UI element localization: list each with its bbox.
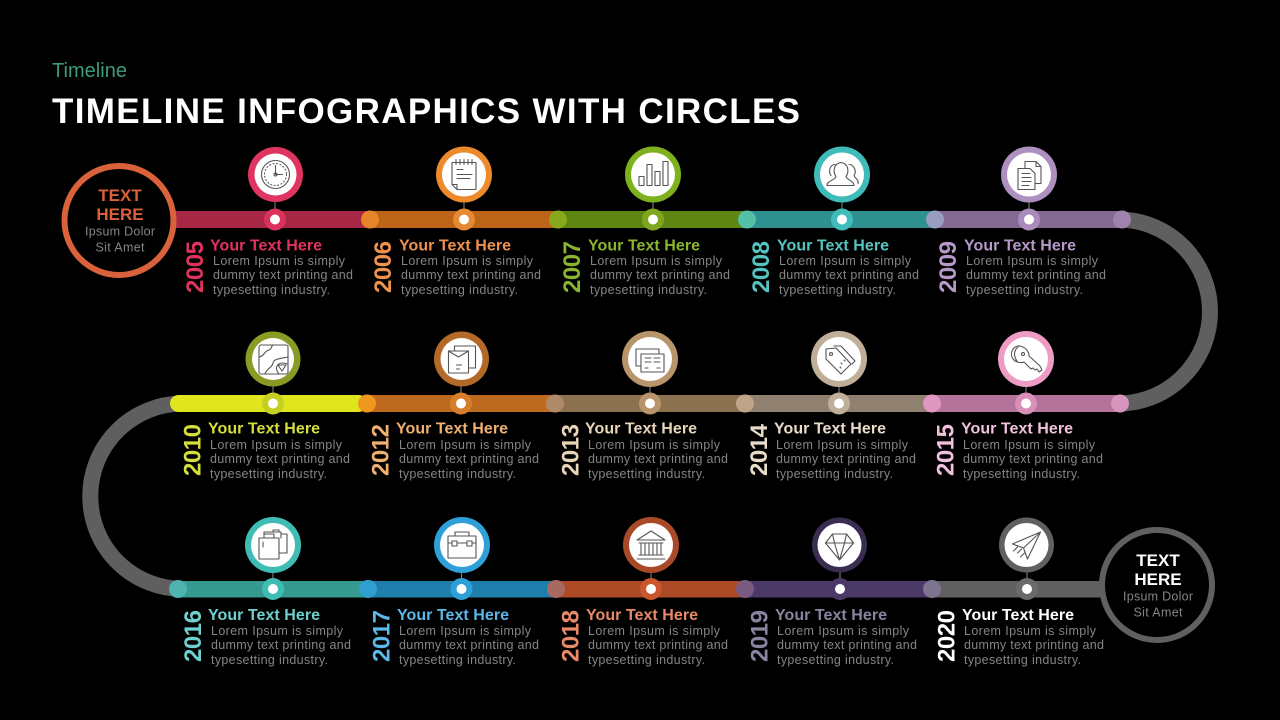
- heading 2009: Your Text Here: [964, 238, 1076, 254]
- milestone 2006: [370, 146, 541, 297]
- icon: clock: [262, 160, 290, 188]
- heading 2012: Your Text Here: [396, 420, 508, 438]
- description 2012: Lorem Ipsum is simply: [399, 438, 532, 452]
- milestone 2015: [932, 331, 1103, 481]
- description 2015: Lorem Ipsum is simply: [963, 438, 1096, 452]
- description 2007: [590, 254, 730, 297]
- icon: cards: [636, 349, 664, 372]
- timeline track: row 2: [170, 394, 1129, 412]
- description 2019: Lorem Ipsum is simply: [777, 624, 910, 638]
- description 2013: dummy text printing and: [588, 452, 728, 466]
- description 2014: Lorem Ipsum is simply: [776, 438, 909, 452]
- description 2018: typesetting industry.: [588, 653, 705, 667]
- year 2007: 2007: [559, 241, 586, 293]
- description 2019: dummy text printing and: [777, 638, 917, 652]
- description 2010: dummy text printing and: [210, 452, 350, 466]
- description 2015: [963, 438, 1103, 481]
- year 2016: 2016: [180, 610, 207, 662]
- milestone 2009: [935, 146, 1106, 297]
- description 2016: [211, 624, 351, 667]
- end circle: [1102, 530, 1212, 640]
- icon: key: [1011, 346, 1042, 372]
- description 2005: [213, 254, 353, 297]
- icon: briefcase: [448, 532, 476, 558]
- milestone 2012: [368, 332, 539, 481]
- milestone 2018: [558, 517, 728, 667]
- milestone 2016: [180, 517, 351, 667]
- year 2010: 2010: [180, 424, 206, 476]
- heading 2010: Your Text Here: [208, 420, 320, 438]
- description 2008: typesetting industry.: [779, 283, 896, 297]
- description 2005: Lorem Ipsum is simply: [213, 254, 346, 268]
- heading 2005: Your Text Here: [210, 238, 322, 254]
- description 2007: dummy text printing and: [590, 268, 730, 282]
- icon: documents: [1018, 162, 1041, 190]
- milestone 2019: [746, 518, 917, 667]
- year 2018: 2018: [558, 610, 584, 662]
- year 2006: 2006: [370, 241, 397, 293]
- description 2007: Lorem Ipsum is simply: [590, 254, 723, 268]
- description 2014: dummy text printing and: [776, 452, 916, 466]
- description 2009: dummy text printing and: [966, 268, 1106, 282]
- description 2006: Lorem Ipsum is simply: [401, 254, 534, 268]
- description 2014: [776, 438, 916, 481]
- description 2016: dummy text printing and: [211, 638, 351, 652]
- end circle: Ipsum Dolor: [1123, 590, 1193, 604]
- eyebrow label: Timeline: [52, 60, 127, 82]
- end circle: TEXT: [1136, 551, 1180, 570]
- milestone 2008: [748, 146, 919, 297]
- icon: people: [827, 162, 858, 186]
- year 2008: 2008: [748, 241, 775, 293]
- description 2020: [964, 624, 1104, 667]
- description 2009: typesetting industry.: [966, 283, 1083, 297]
- icon: luggage: [259, 530, 287, 559]
- description 2013: [588, 438, 728, 481]
- description 2010: Lorem Ipsum is simply: [210, 438, 343, 452]
- year 2013: 2013: [558, 424, 584, 476]
- description 2010: typesetting industry.: [210, 467, 327, 481]
- description 2006: [401, 254, 541, 297]
- milestone 2013: [558, 331, 728, 481]
- description 2016: Lorem Ipsum is simply: [211, 624, 344, 638]
- start circle: Ipsum Dolor: [85, 224, 155, 238]
- milestone 2014: [746, 331, 916, 481]
- description 2019: typesetting industry.: [777, 653, 894, 667]
- icon: bank: [637, 531, 665, 559]
- start circle: Sit Amet: [96, 240, 145, 254]
- heading 2014: Your Text Here: [774, 420, 886, 438]
- year 2009: 2009: [935, 241, 962, 293]
- description 2019: [777, 624, 917, 667]
- milestone 2007: [559, 146, 730, 297]
- description 2012: [399, 438, 539, 481]
- description 2013: Lorem Ipsum is simply: [588, 438, 721, 452]
- heading 2019: Your Text Here: [775, 607, 887, 624]
- description 2017: Lorem Ipsum is simply: [399, 624, 532, 638]
- year 2005: 2005: [182, 241, 209, 293]
- description 2012: dummy text printing and: [399, 452, 539, 466]
- heading 2013: Your Text Here: [585, 420, 697, 438]
- start circle: [64, 166, 174, 275]
- heading 2015: Your Text Here: [961, 420, 1073, 438]
- start circle: HERE: [96, 205, 144, 224]
- end circle: HERE: [1134, 570, 1182, 589]
- description 2013: typesetting industry.: [588, 467, 705, 481]
- icon: map: [259, 345, 288, 374]
- year 2015: 2015: [932, 424, 960, 476]
- description 2008: dummy text printing and: [779, 268, 919, 282]
- description 2016: typesetting industry.: [211, 653, 328, 667]
- year 2012: 2012: [368, 424, 394, 476]
- end circle: Sit Amet: [1134, 606, 1183, 620]
- description 2015: dummy text printing and: [963, 452, 1103, 466]
- year 2017: 2017: [368, 610, 396, 662]
- description 2015: typesetting industry.: [963, 467, 1080, 481]
- curved connector: left: [90, 404, 183, 589]
- description 2010: [210, 438, 350, 481]
- description 2017: [399, 624, 539, 667]
- year 2019: 2019: [746, 610, 774, 662]
- icon: price tags: [826, 346, 855, 374]
- heading 2008: Your Text Here: [777, 238, 889, 254]
- start circle: TEXT: [98, 186, 142, 205]
- timeline track: row 1: [172, 210, 1131, 228]
- milestone 2005: [182, 147, 353, 297]
- year 2014: 2014: [746, 423, 773, 476]
- description 2018: dummy text printing and: [588, 638, 728, 652]
- heading 2016: Your Text Here: [208, 607, 320, 624]
- icon: diamond: [826, 534, 854, 560]
- icon: bar chart: [639, 162, 668, 186]
- heading 2007: Your Text Here: [588, 238, 700, 254]
- milestone 2017: [368, 517, 539, 667]
- description 2014: typesetting industry.: [776, 467, 893, 481]
- description 2006: dummy text printing and: [401, 268, 541, 282]
- description 2017: dummy text printing and: [399, 638, 539, 652]
- description 2009: [966, 254, 1106, 297]
- icon: notepad: [452, 160, 476, 190]
- heading 2018: Your Text Here: [586, 607, 698, 624]
- description 2008: Lorem Ipsum is simply: [779, 254, 912, 268]
- description 2009: Lorem Ipsum is simply: [966, 254, 1099, 268]
- description 2012: typesetting industry.: [399, 467, 516, 481]
- description 2020: typesetting industry.: [964, 653, 1081, 667]
- description 2018: [588, 624, 728, 667]
- description 2005: typesetting industry.: [213, 283, 330, 297]
- year 2020: 2020: [934, 610, 960, 662]
- description 2020: Lorem Ipsum is simply: [964, 624, 1097, 638]
- heading 2020: Your Text Here: [962, 607, 1074, 624]
- description 2017: typesetting industry.: [399, 653, 516, 667]
- milestone 2010: [180, 332, 350, 481]
- icon: paper plane: [1012, 532, 1040, 559]
- timeline track: row 3: [169, 580, 1107, 598]
- description 2008: [779, 254, 919, 297]
- milestone 2020: [934, 518, 1104, 667]
- icon: envelope folder: [448, 346, 476, 373]
- curved connector: right: [1118, 220, 1210, 404]
- description 2006: typesetting industry.: [401, 283, 518, 297]
- heading 2006: Your Text Here: [399, 238, 511, 254]
- description 2005: dummy text printing and: [213, 268, 353, 282]
- heading 2017: Your Text Here: [397, 607, 509, 624]
- description 2018: Lorem Ipsum is simply: [588, 624, 721, 638]
- description 2007: typesetting industry.: [590, 283, 707, 297]
- description 2020: dummy text printing and: [964, 638, 1104, 652]
- title: TIMELINE INFOGRAPHICS WITH CIRCLES: [52, 92, 800, 131]
